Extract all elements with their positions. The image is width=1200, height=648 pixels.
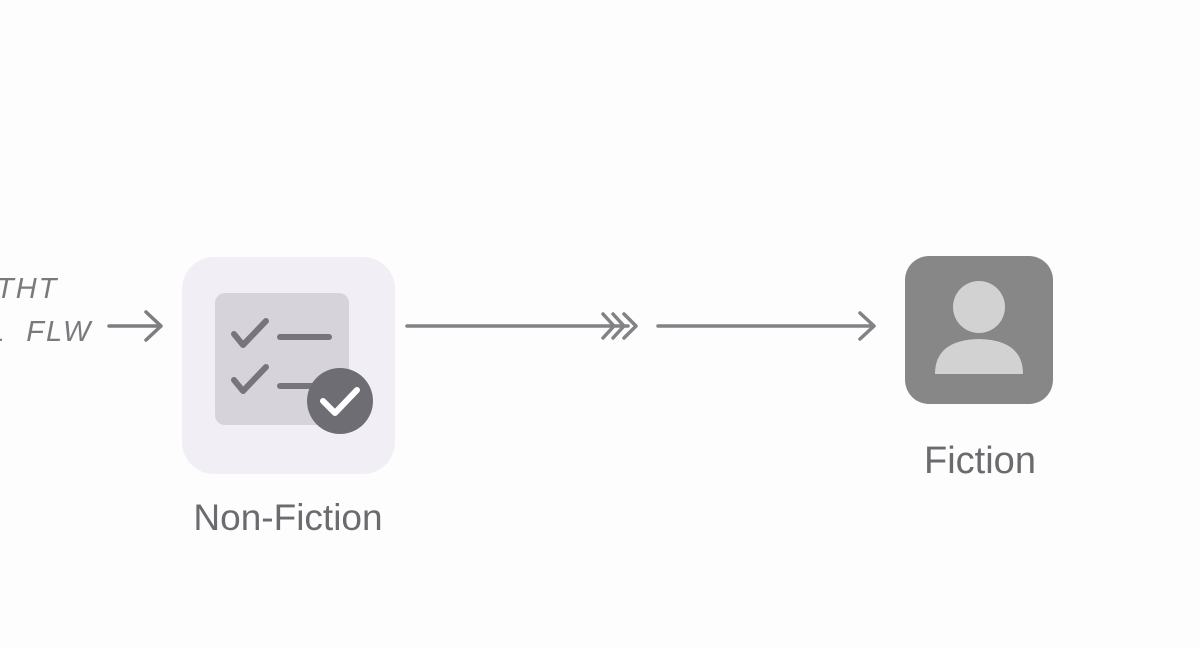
label: Non-Fiction: Non-Fiction xyxy=(193,497,383,538)
icon: fiction person xyxy=(905,256,1053,404)
icon: non-fiction checklist xyxy=(182,257,395,474)
arrow: caption to non-fiction xyxy=(109,312,161,340)
label: Fiction: Fiction xyxy=(924,440,1036,482)
arrow: non-fiction to fiction xyxy=(407,313,874,339)
text: left cropped caption xyxy=(0,273,93,348)
